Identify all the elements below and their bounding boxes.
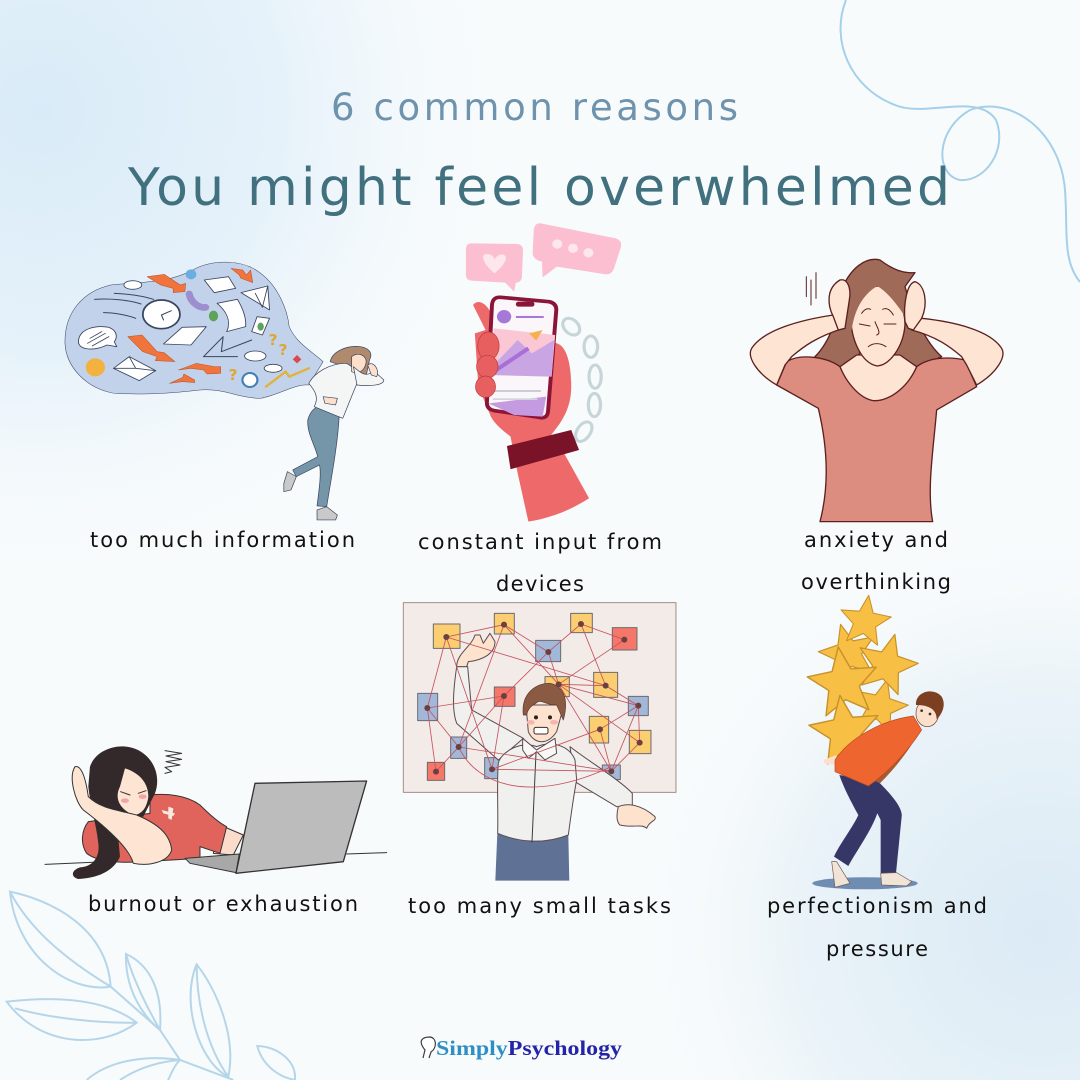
man: mouth and eyes — [527, 715, 558, 734]
shirt emblem — [162, 807, 175, 820]
man: left arm — [454, 667, 523, 760]
man: head — [526, 705, 564, 742]
face — [920, 709, 931, 715]
front hair — [842, 265, 905, 330]
laptop base — [185, 854, 239, 873]
inner shirt — [873, 730, 920, 783]
decorative leaves — [7, 892, 295, 1080]
desk line — [45, 853, 387, 864]
label: constant input from devices — [418, 530, 662, 596]
trousers — [834, 775, 902, 873]
label: constant input from devices: constant input from — [418, 530, 662, 554]
woman figure — [284, 346, 384, 520]
label: too many small tasks: too many small tasks — [408, 894, 671, 918]
subtitle: 6 common reasons — [331, 86, 738, 129]
string pins — [424, 621, 643, 775]
small icons — [86, 269, 309, 387]
label: burnout or exhaustion: burnout or exhaustion — [88, 892, 358, 916]
label: anxiety and overthinking: anxiety and — [804, 528, 948, 552]
stress marks — [806, 273, 816, 305]
illustration: woman overloaded with information — [65, 262, 384, 520]
back hair — [815, 259, 942, 371]
arms — [750, 315, 843, 385]
stress scribble — [165, 751, 182, 773]
face — [118, 768, 148, 815]
wrist cuff — [507, 430, 579, 469]
red strings — [427, 624, 640, 787]
question marks: ? — [268, 331, 278, 349]
hair — [916, 691, 944, 719]
hair back — [73, 746, 157, 879]
hand — [823, 755, 837, 765]
facial features — [859, 309, 896, 347]
jacket — [835, 716, 922, 786]
man: right arm — [570, 747, 632, 808]
question marks: ? — [229, 366, 238, 384]
illustration: man carrying stars — [804, 592, 944, 889]
task board — [403, 603, 676, 792]
question marks — [228, 331, 288, 384]
white message shapes — [78, 277, 282, 381]
hands — [457, 633, 495, 667]
label: perfectionism and pressure: pressure — [826, 937, 928, 961]
head — [916, 700, 939, 727]
stars — [804, 592, 924, 766]
illustration: hand chained to phone — [466, 223, 621, 522]
label: anxiety and overthinking: overthinking — [801, 570, 951, 594]
label: constant input from devices: devices — [496, 572, 584, 596]
label: perfectionism and pressure: perfectionism and — [767, 894, 987, 918]
man: collar — [523, 738, 557, 760]
notification bubbles — [466, 223, 621, 292]
fingers — [476, 332, 499, 397]
arm — [72, 766, 172, 864]
neck and chest — [840, 355, 917, 401]
orange arrows — [128, 268, 253, 383]
shoes — [832, 862, 912, 887]
chain — [559, 315, 601, 444]
question marks: ? — [278, 341, 288, 359]
man: shirt — [498, 744, 577, 841]
illustration: anxious woman holding head — [750, 259, 1003, 522]
label: perfectionism and pressure — [767, 894, 987, 961]
shirt — [777, 357, 977, 522]
decorative curved line — [841, 0, 1080, 282]
shirt — [82, 794, 227, 862]
illustration: tangled man before task board — [403, 603, 676, 881]
shadow — [812, 877, 918, 889]
hands — [829, 280, 850, 330]
title: You might feel overwhelmed — [127, 158, 950, 218]
logo: SimplyPsychology — [421, 1036, 623, 1060]
laptop lid — [236, 781, 367, 873]
clock and speed lines — [95, 293, 180, 329]
phone — [487, 297, 556, 418]
man: trousers — [495, 833, 569, 881]
cheeks and eyes — [121, 791, 147, 803]
label: anxiety and overthinking — [801, 528, 951, 594]
hand and arm — [473, 302, 589, 522]
man: hair — [523, 683, 566, 720]
illustration: exhausted woman at laptop — [45, 746, 387, 879]
forearm — [213, 825, 243, 855]
label: too much information: too much information — [90, 528, 355, 552]
face — [851, 286, 905, 366]
information cloud — [65, 262, 323, 398]
logo wordmark: Simply Psychology — [436, 1036, 623, 1060]
logo head icon — [421, 1037, 435, 1058]
task squares — [418, 613, 651, 780]
